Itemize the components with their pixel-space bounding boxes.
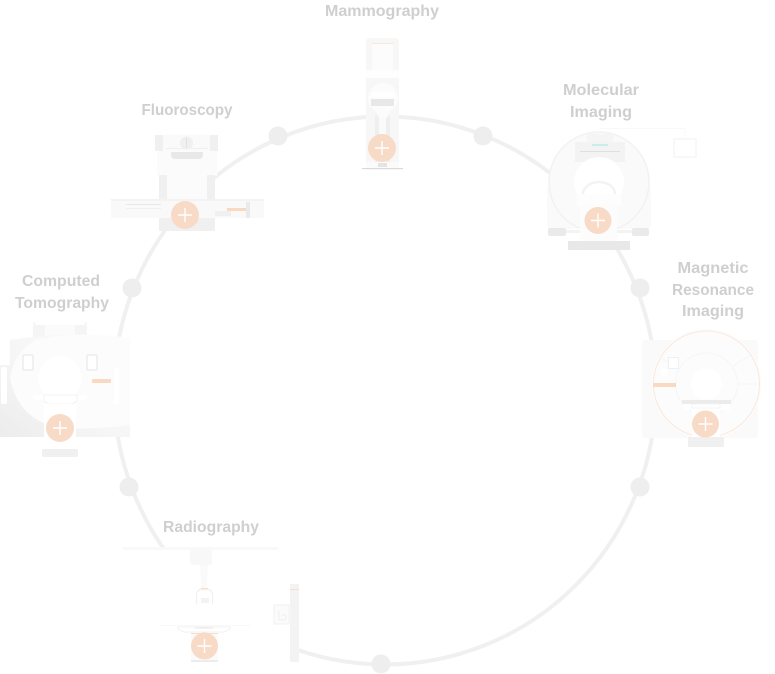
heading: Radiography: Radiography [163, 519, 259, 536]
modality: Molecular Imaging [547, 82, 696, 250]
heading: Mammography: Mammography [325, 3, 439, 20]
icon: fluoroscopy unit [111, 135, 264, 231]
icon: MRI scanner [642, 329, 762, 447]
ring connecting modalities [114, 116, 656, 664]
icon: PET/CT scanner [547, 128, 696, 250]
heading: Computed Tomography: Tomography [15, 295, 109, 312]
modality: Fluoroscopy [111, 102, 264, 231]
add button [171, 201, 199, 229]
modality: Magnetic Resonance Imaging [642, 260, 762, 447]
heading: Molecular Imaging [563, 82, 639, 121]
add button [191, 632, 218, 660]
ring node dots [120, 126, 650, 674]
icon: CT scanner [0, 322, 130, 457]
heading: Computed Tomography: Computed [22, 273, 100, 290]
heading: Magnetic Resonance Imaging: Resonance [672, 282, 754, 299]
heading: Magnetic Resonance Imaging [672, 260, 754, 320]
backing mask behind radiography unit [122, 547, 290, 674]
modality: Mammography [325, 3, 439, 169]
heading: Molecular Imaging: Molecular [563, 82, 639, 99]
add button [46, 414, 74, 442]
modality: Computed Tomography [0, 273, 130, 457]
add button [584, 207, 612, 234]
modality: Radiography [122, 519, 299, 674]
heading: Computed Tomography [15, 273, 109, 312]
add button [368, 134, 396, 162]
heading: Molecular Imaging: Imaging [570, 104, 632, 121]
heading: Magnetic Resonance Imaging: Magnetic [678, 260, 749, 277]
heading: Fluoroscopy: Fluoroscopy [142, 102, 233, 119]
add button [692, 410, 719, 438]
heading: Magnetic Resonance Imaging: Imaging [682, 303, 744, 320]
icon: X-ray unit [123, 547, 299, 662]
icon: mammography unit [362, 38, 403, 169]
